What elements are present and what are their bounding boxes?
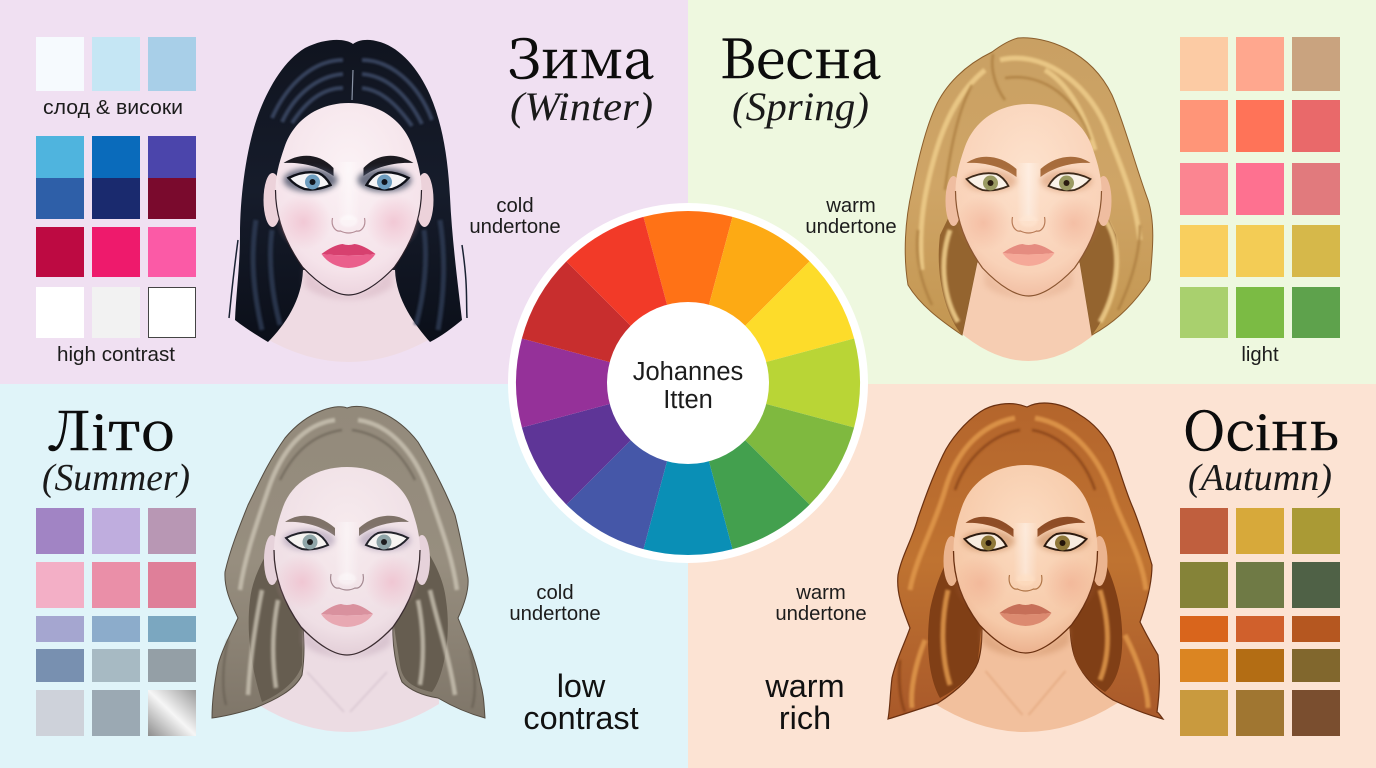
- chart: Itten colour wheel: [508, 203, 868, 563]
- label: temples: слод & високи: [43, 97, 183, 119]
- label: low contrast: contrast: [523, 700, 639, 736]
- panel: summer background: [0, 384, 688, 768]
- label: warm undertone spring: undertone: [805, 216, 897, 238]
- panel: winter background: [0, 0, 688, 384]
- label: light: light: [1241, 344, 1279, 366]
- subtitle: Summer: (Summer): [42, 457, 190, 499]
- portrait: winter woman: [229, 40, 467, 362]
- label: cold undertone summer: cold: [536, 582, 574, 604]
- title: Summer: Літо: [48, 389, 175, 466]
- label: low contrast: low: [557, 668, 606, 704]
- panel: autumn swatches: [1180, 508, 1340, 736]
- portrait: summer woman: [212, 406, 485, 732]
- label: warm rich: warm: [764, 668, 845, 704]
- portrait: spring woman: [905, 38, 1153, 361]
- label: warm undertone autumn: undertone: [775, 603, 867, 625]
- panel: winter swatches: [36, 37, 196, 338]
- panel: autumn background: [688, 384, 1376, 768]
- label: warm undertone spring: warm: [825, 195, 876, 217]
- wheel label: Itten: [663, 386, 713, 414]
- title: Spring: Весна: [720, 17, 881, 94]
- wheel segments: [516, 211, 860, 555]
- title: Winter: Зима: [508, 17, 654, 94]
- subtitle: Winter: (Winter): [510, 84, 653, 129]
- label: high contrast: high contrast: [57, 344, 175, 366]
- wheel label: Johannes: [633, 358, 743, 386]
- label: warm rich: rich: [779, 700, 831, 736]
- label: cold undertone winter: undertone: [469, 216, 561, 238]
- panel: spring background: [688, 0, 1376, 384]
- portrait: autumn woman: [888, 403, 1163, 732]
- label: cold undertone summer: undertone: [509, 603, 601, 625]
- panel: summer swatches: [36, 508, 196, 736]
- wheel outer ring: [508, 203, 868, 563]
- subtitle: Spring: (Spring): [732, 84, 869, 129]
- panel: spring swatches: [1180, 37, 1340, 338]
- label: warm undertone autumn: warm: [795, 582, 846, 604]
- title: Autumn: Осінь: [1183, 389, 1338, 466]
- subtitle: Autumn: (Autumn): [1188, 457, 1332, 499]
- label: cold undertone winter: cold: [496, 195, 534, 217]
- wheel centre: [607, 302, 769, 464]
